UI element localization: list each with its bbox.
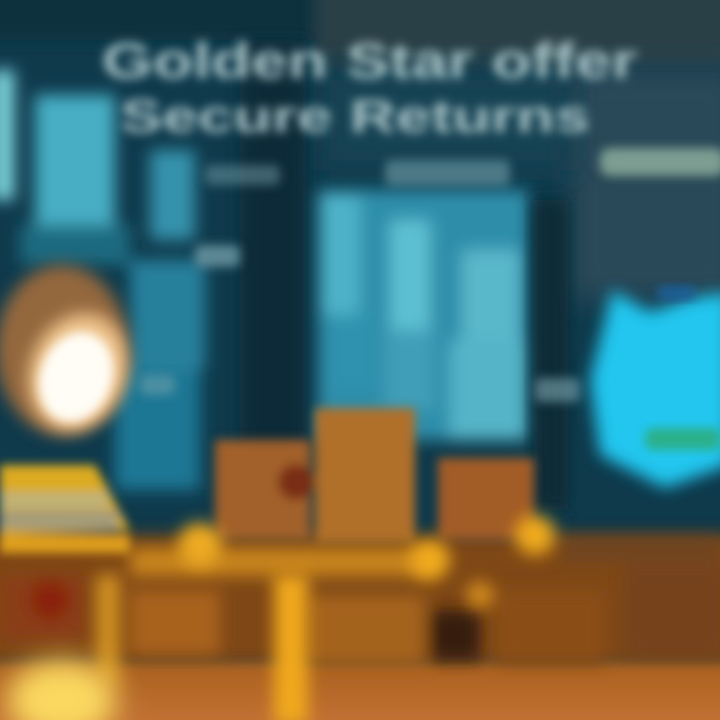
label: top right light band (600, 148, 720, 176)
pillar: dark centre column (240, 40, 306, 450)
title: blurred headline: Golden Star offer (102, 33, 637, 89)
title: blurred headline (102, 33, 637, 142)
text block: blurred small captions (140, 160, 580, 402)
pillar: dark right column (534, 200, 568, 510)
stack: striped yellow books (0, 465, 130, 553)
title: blurred headline: Secure Returns (120, 90, 590, 142)
highlights: yellow glints (96, 515, 555, 720)
glow: bottom left light (7, 660, 117, 720)
panel: left blue windows (0, 70, 205, 490)
icon: cyan shield sign (590, 286, 720, 488)
icon: lamp with glowing lens (0, 265, 144, 445)
boxes: stacked orange cartons (215, 408, 534, 543)
panel: centre blue windows (318, 190, 528, 440)
floor: amber base (0, 535, 720, 720)
boxes: lower amber cartons (0, 540, 720, 665)
